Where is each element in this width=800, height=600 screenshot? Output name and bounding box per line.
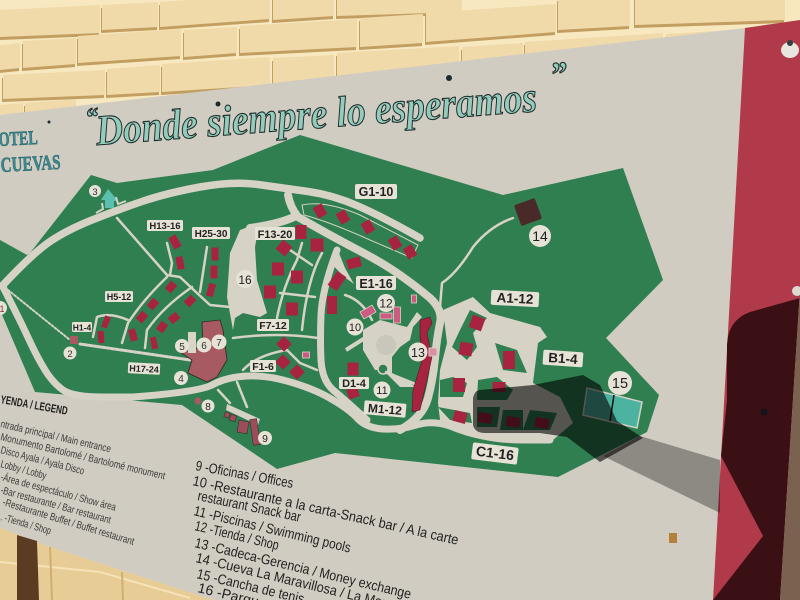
tagline title: Donde siempre lo esperamos (93, 74, 538, 155)
label E1-16: E1-16 (359, 277, 393, 291)
G row villas strip (302, 204, 418, 258)
marker 3: 3 (92, 187, 98, 198)
tagline title: “ (84, 102, 99, 132)
marker 2: 2 (67, 349, 73, 360)
disco 8 marker (194, 398, 202, 404)
icon: disco arrow (96, 189, 126, 213)
legend: right column: 9 -Oficinas / Offices (194, 457, 295, 491)
legend: right column (191, 457, 460, 600)
marker 10 (346, 318, 364, 336)
marker 10: 10 (349, 322, 361, 334)
legend: left column: ntrada principal / Main entrance (0, 418, 112, 455)
numbered map markers (0, 185, 632, 445)
central building 13 (412, 317, 437, 412)
label F13-20: F13-20 (258, 229, 292, 241)
marker 7: 7 (216, 338, 222, 349)
hand shadow on map (473, 375, 643, 462)
hotel name: CUEVAS (0, 150, 61, 177)
southern road (3, 287, 550, 440)
area labels (72, 184, 583, 465)
legend: right column: 10 -Restaurante a la carta-Snack bar / A la carte (191, 472, 460, 548)
sticker on red strip (781, 40, 799, 58)
marker 9: 9 (262, 433, 268, 445)
villa islands A B C area (438, 297, 573, 440)
secondary paths (93, 218, 513, 407)
marker 11 (374, 382, 390, 398)
hotel name (0, 127, 61, 177)
legend heading: YENDA / LEGEND (0, 394, 69, 418)
legend: left column: Lobby / Lobby (0, 458, 48, 482)
marker 6 (196, 338, 212, 352)
central plaza (346, 312, 422, 387)
tennis court 15 (583, 388, 642, 428)
legend: right column: restaurant Snack bar (196, 487, 303, 525)
marker 5: 5 (179, 342, 185, 353)
label H25-30: H25-30 (195, 229, 228, 240)
legend: left column: -Bar restaurante / Bar restaurant (0, 484, 112, 526)
marker 14 (529, 225, 551, 247)
hand shadow on board (603, 436, 720, 513)
marker 16 (236, 270, 254, 288)
legend: left column: -Área de espectáculo / Show área (0, 470, 118, 514)
marker 9 (258, 431, 272, 445)
marker 15: 15 (612, 376, 628, 392)
marker 6: 6 (201, 341, 207, 352)
villas (97, 203, 550, 429)
label M1-12: M1-12 (367, 401, 403, 418)
label C1-16: C1-16 (475, 443, 515, 463)
legend: left column: Disco Ayala / Ayala Disco (0, 444, 86, 477)
inner ring road (288, 195, 441, 430)
dotted walks (8, 290, 70, 340)
cave 14 building (514, 198, 542, 226)
marker 15 (608, 371, 632, 395)
lower left brick wall (0, 528, 213, 600)
ring link to park (250, 216, 296, 228)
legend: right column: 11 -Piscinas / Swimming pools (192, 502, 353, 556)
label B1-4: B1-4 (548, 350, 579, 367)
shops in pink (302, 295, 416, 358)
monument 2 marker (70, 336, 78, 344)
legend: left column: -Restaurante Buffet / Buffet restaurant (1, 496, 136, 548)
label H17-24: H17-24 (129, 363, 159, 375)
green map area (0, 135, 663, 477)
label H5-12: H5-12 (107, 292, 131, 302)
marker 12 (377, 294, 395, 312)
main hotel building (180, 320, 227, 382)
marker 8: 8 (205, 402, 211, 413)
marker 13 (408, 342, 428, 362)
tagline title: ” (549, 56, 569, 94)
red side strip (713, 20, 800, 600)
marker 11: 11 (376, 385, 388, 397)
marker 2 (64, 346, 76, 360)
crescent of east road (330, 248, 354, 284)
marker 14: 14 (532, 228, 548, 244)
main entrance road (3, 183, 420, 285)
legend: left column: . -Tienda / Shop (0, 511, 53, 537)
label H1-4: H1-4 (73, 322, 91, 332)
marker 5 (175, 339, 189, 353)
hand shadow on red strip (713, 290, 800, 600)
marker 12: 12 (379, 296, 393, 310)
label G1-10: G1-10 (359, 185, 393, 199)
marker 8 (202, 400, 214, 413)
marker 4 (174, 371, 188, 385)
mounting holes and rust mark (48, 75, 800, 543)
legend: left column: Monumento Bartolomé / Bartolomé monument (0, 431, 166, 482)
label A1-12: A1-12 (496, 290, 534, 307)
road network (3, 183, 550, 440)
label D1-4: D1-4 (342, 378, 367, 390)
park area 16 (227, 225, 267, 330)
legend: right column: 12 -Tienda / Shop (193, 517, 281, 553)
label F7-12: F7-12 (259, 320, 287, 332)
offices buildings (224, 404, 260, 445)
inner east road (320, 250, 367, 420)
label F1-6: F1-6 (252, 361, 274, 373)
legend: left column (0, 394, 166, 548)
marker 3 (89, 185, 101, 198)
shaded wall lower right (780, 290, 800, 600)
marker 13: 13 (411, 346, 425, 360)
marker 4: 4 (178, 374, 184, 385)
marker 7 (212, 334, 226, 350)
marker 1 (0, 301, 7, 315)
label H13-16: H13-16 (149, 221, 181, 232)
marker 16: 16 (238, 273, 252, 287)
